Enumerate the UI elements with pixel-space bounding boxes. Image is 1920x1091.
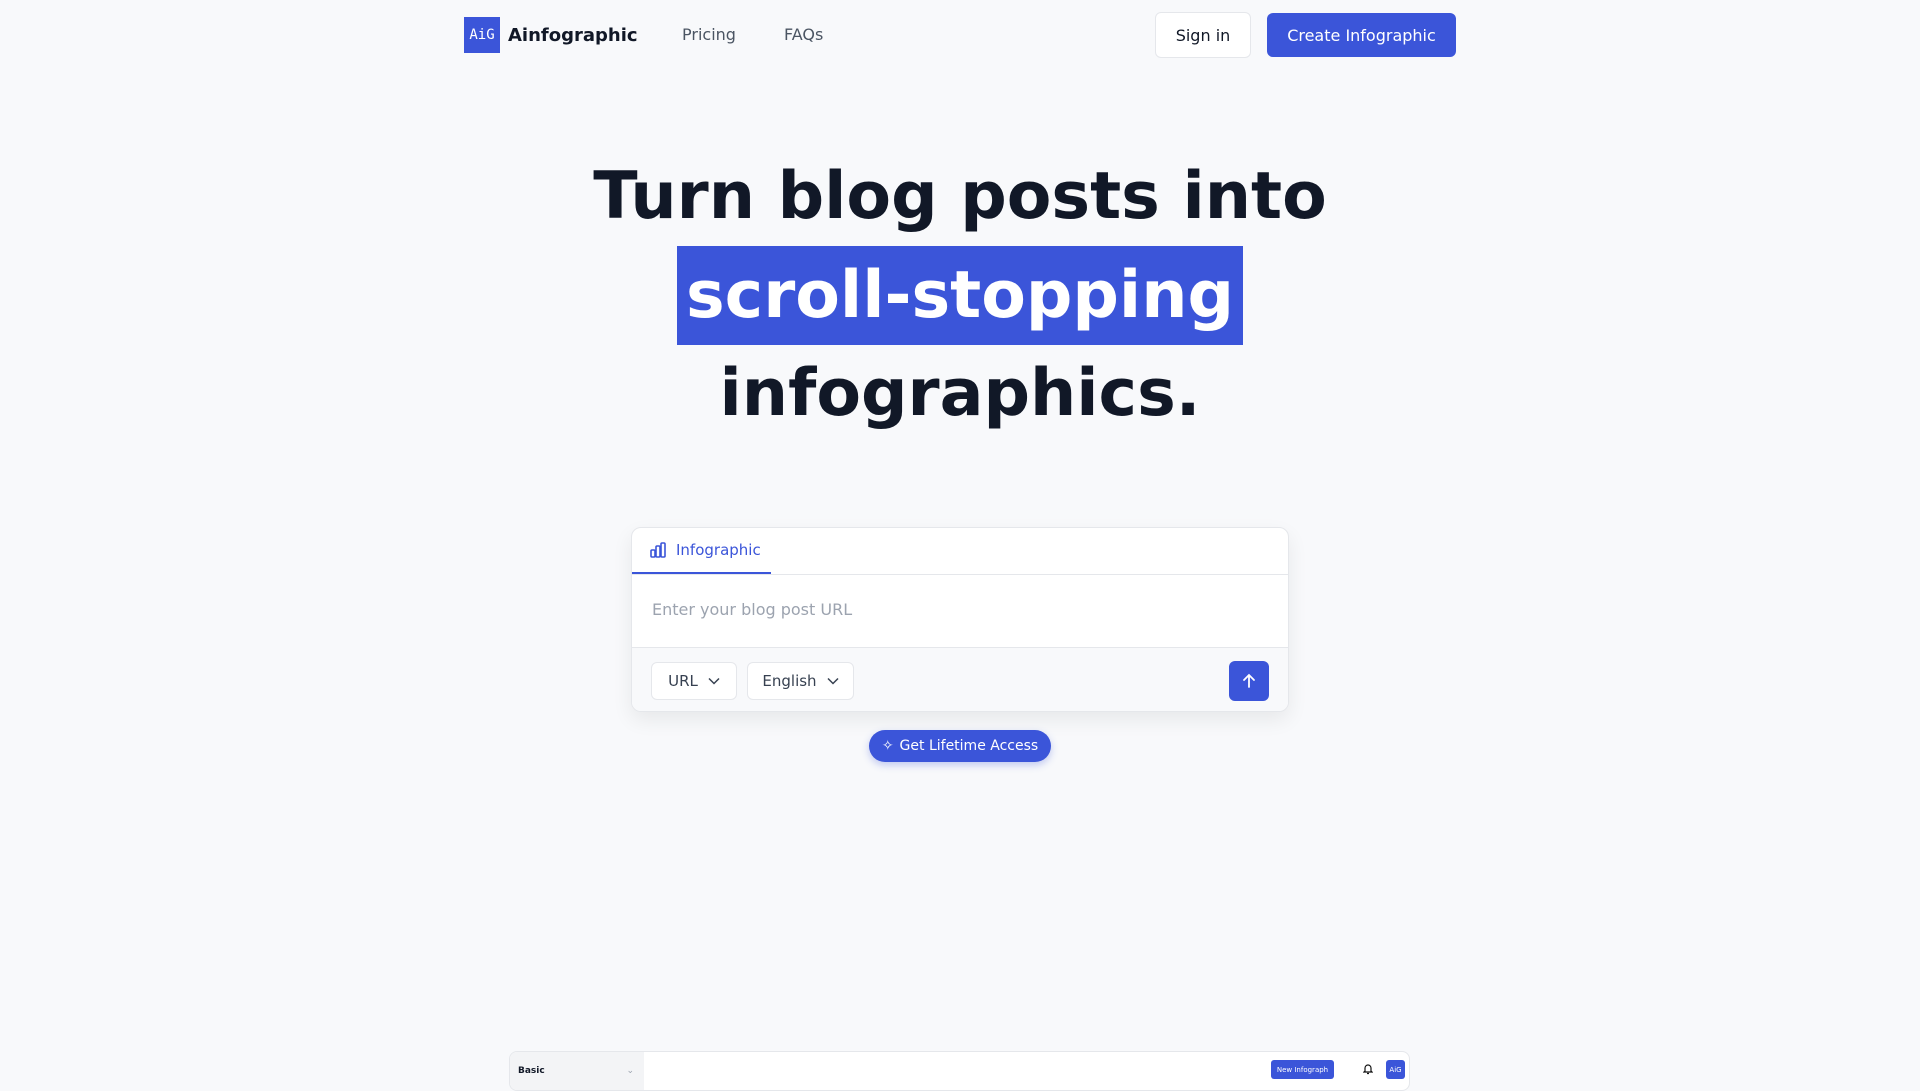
- card footer: [632, 647, 1288, 713]
- dropdown: url: URL: [668, 672, 698, 690]
- sign in button: Sign in: [1176, 26, 1230, 44]
- lifetime access button: Get Lifetime Access: [900, 738, 1038, 754]
- create infographic button: Create Infographic: [1287, 26, 1436, 44]
- preview avatar: [1386, 1060, 1405, 1079]
- preview sidebar: ⌄: [626, 1066, 634, 1076]
- icon: logo mark: AiG: [469, 27, 495, 43]
- title: [593, 159, 1327, 431]
- lifetime access button: ✧: [882, 738, 894, 754]
- logo: [464, 17, 638, 53]
- dropdown: url: [651, 662, 737, 700]
- create infographic button: [1267, 13, 1456, 57]
- title: infographics.: [720, 356, 1200, 431]
- preview new button: New Infograph: [1277, 1066, 1328, 1074]
- input card: [631, 527, 1289, 712]
- nav: faqs: FAQs: [784, 25, 823, 44]
- icon: bar chart: [650, 542, 666, 558]
- preview new button: [1271, 1060, 1334, 1079]
- submit button: [1229, 661, 1269, 701]
- highlight: scroll-stopping: [686, 258, 1234, 333]
- brand name: Ainfographic: [508, 24, 638, 46]
- app preview: [509, 1051, 1410, 1091]
- dropdown: language: English: [762, 672, 817, 690]
- preview avatar: AiG: [1389, 1066, 1402, 1074]
- title: Turn blog posts into: [593, 159, 1327, 234]
- sign in button: [1155, 12, 1251, 58]
- preview sidebar: [510, 1052, 644, 1091]
- preview bell: [1363, 1064, 1373, 1074]
- url input placeholder: Enter your blog post URL: [652, 600, 852, 619]
- preview sidebar: Basic: [518, 1066, 545, 1076]
- nav: pricing: Pricing: [682, 25, 736, 44]
- tab: infographic: [632, 528, 771, 575]
- lifetime access button: [869, 730, 1051, 762]
- icon: logo mark: [464, 17, 500, 53]
- tab: infographic: Infographic: [676, 541, 761, 559]
- dropdown: language: [747, 662, 854, 700]
